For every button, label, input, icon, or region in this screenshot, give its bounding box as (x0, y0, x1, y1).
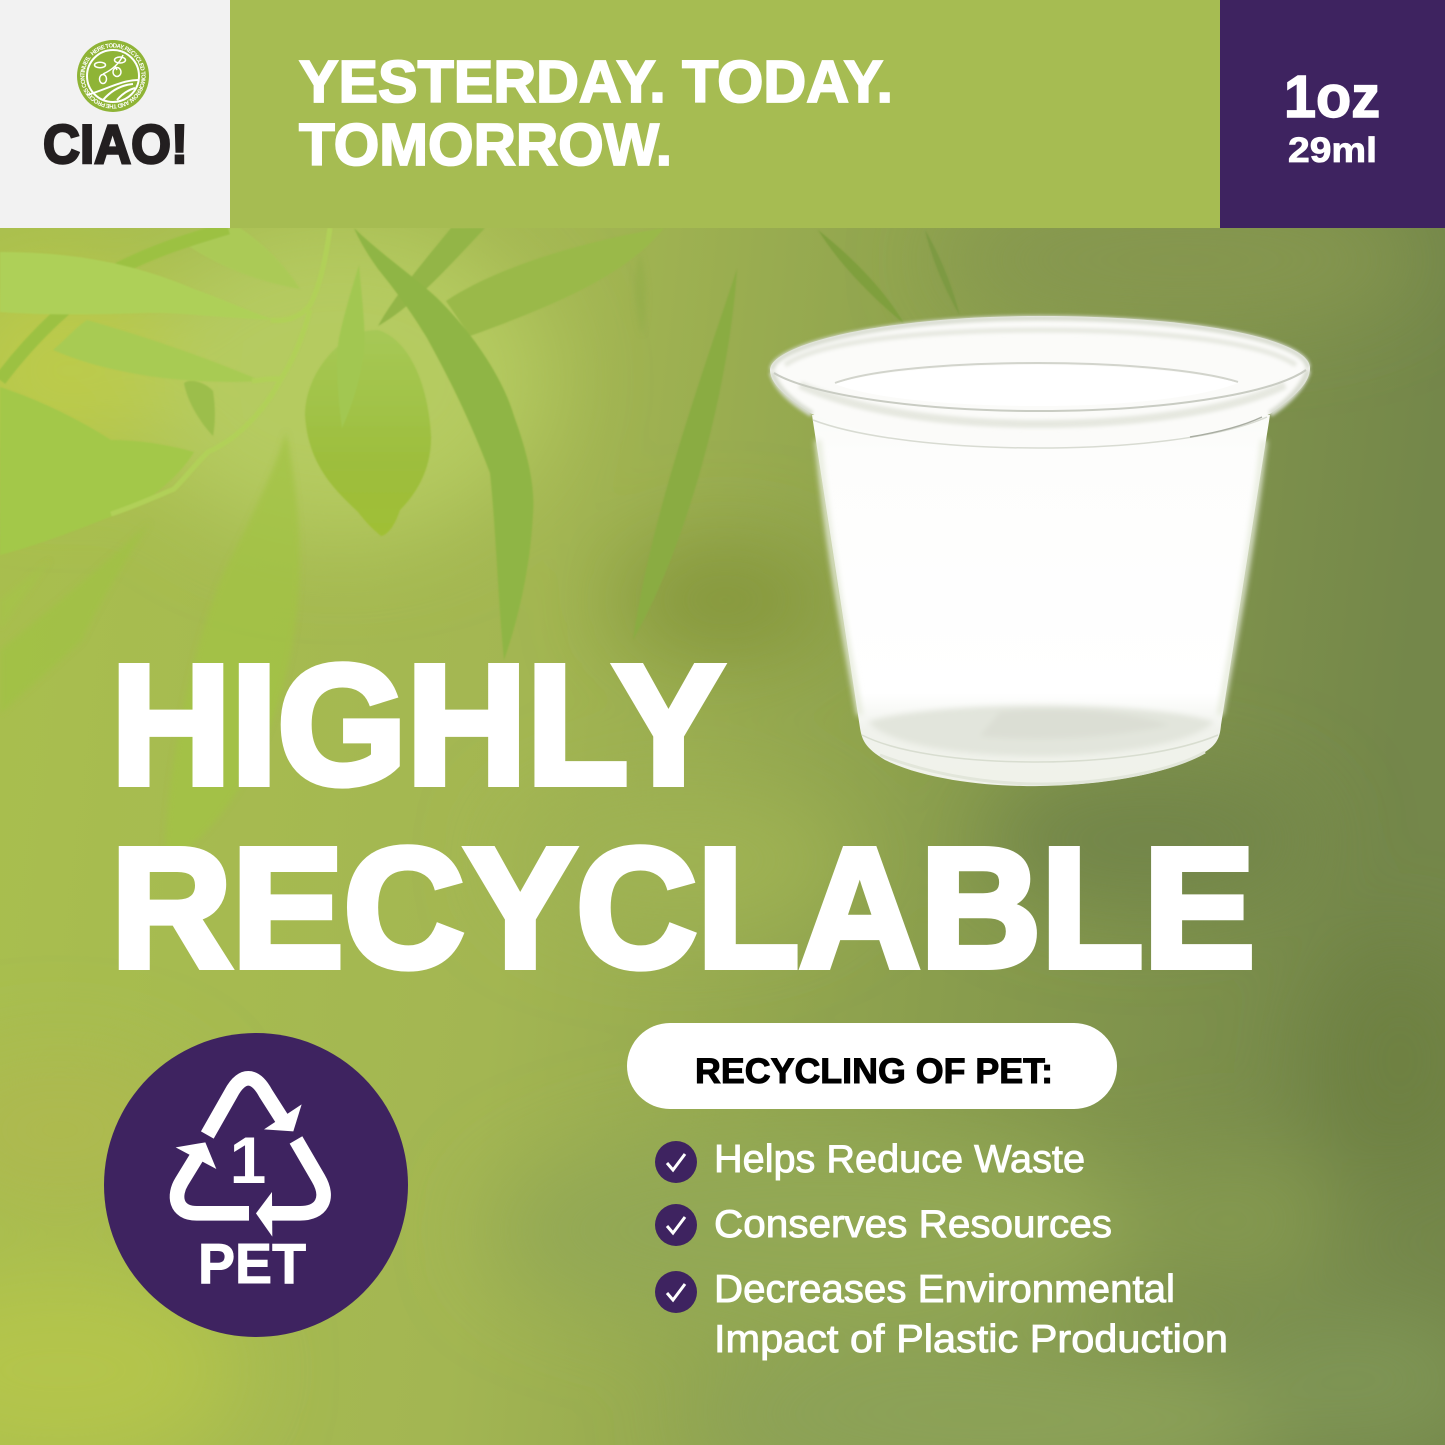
leaf: middle (53, 320, 262, 382)
logo: olive seal: HERE TODAY, RECYCLED TOMORROW. AND THE PROCESS CONTINUES. (80, 43, 146, 109)
header: tagline band: YESTERDAY. TODAY. (299, 49, 893, 115)
leaf: small back (184, 381, 215, 436)
benefit list (655, 1138, 1228, 1361)
headline: HIGHLY (111, 630, 724, 820)
leaf: top right (446, 228, 664, 336)
headline: RECYCLABLE (111, 814, 1255, 1004)
product: clear plastic cup (770, 316, 1310, 786)
headline (111, 630, 1255, 1004)
logo: wordmark: CIAO! (43, 113, 188, 175)
benefit: reduce waste: Helps Reduce Waste (714, 1138, 1085, 1181)
olive fruit (305, 330, 431, 536)
header: logo panel (0, 0, 230, 228)
cup rim (770, 316, 1310, 448)
benefit: decreases impact: Impact of Plastic Production (714, 1318, 1228, 1361)
leaf: over olive (337, 265, 365, 428)
stems (111, 228, 330, 514)
header: size badge: 29ml (1288, 131, 1377, 170)
leaf: long dark (354, 228, 533, 660)
benefit: conserves resources: Conserves Resources (714, 1203, 1112, 1246)
leaf: lower long (165, 432, 300, 865)
leaf: lower left broad (0, 387, 194, 555)
leaf: faint blurred (640, 278, 642, 279)
leaf: back top (378, 228, 485, 326)
leaf: upper left (0, 252, 275, 320)
leaf: thin right (633, 269, 737, 640)
header: size badge (1220, 0, 1445, 228)
header: tagline band: TOMORROW. (299, 112, 672, 178)
icon: recycling triangle arrows (176, 1078, 324, 1237)
leaf: upper back (192, 228, 298, 288)
heading pill: recycling of PET (627, 1023, 1117, 1109)
badge: PET recycling code 1 (104, 1033, 408, 1337)
code number: 1 (230, 1123, 266, 1197)
leaf: lower left (4, 545, 132, 705)
header: size badge: 1oz (1284, 64, 1380, 130)
header: tagline band (230, 0, 1220, 228)
leaf: stem band (0, 228, 228, 380)
heading pill: recycling of PET: RECYCLING OF PET: (695, 1052, 1053, 1091)
cup body (812, 415, 1270, 786)
benefit: decreases impact: Decreases Environmental (714, 1268, 1175, 1311)
benefit: decreases impact (655, 1268, 1228, 1361)
material label: PET (198, 1232, 306, 1296)
